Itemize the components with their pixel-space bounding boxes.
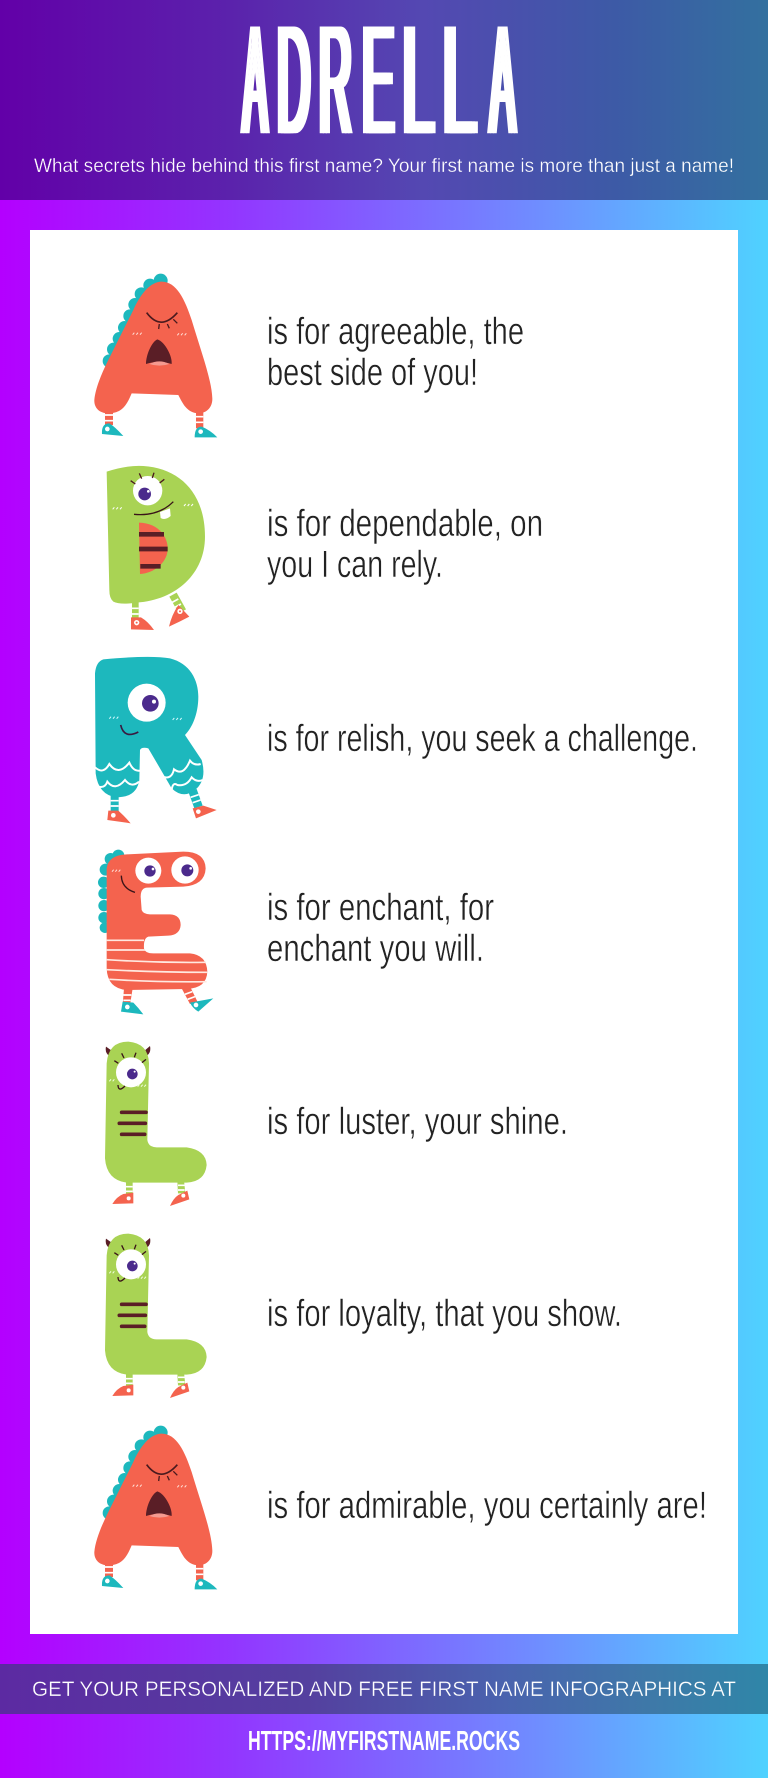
- text: L line: is for luster, your shine.: [267, 1101, 568, 1143]
- text: E line: enchant you will.: [267, 928, 484, 970]
- text: E line: [267, 887, 494, 970]
- text: A line: is for agreeable, the: [267, 311, 524, 353]
- text: D line: you I can rely.: [267, 544, 443, 586]
- footer url: HTTPS://MYFIRSTNAME.ROCKS: [248, 1726, 520, 1757]
- white content panel: [30, 230, 738, 1634]
- icon: letter E monster: [98, 850, 213, 1014]
- icon: letter D monster: [107, 466, 205, 630]
- icon: second letter A monster: [94, 1426, 217, 1589]
- text: D line: [267, 503, 543, 586]
- icon: letter L monster: [105, 1042, 207, 1206]
- text: E line: is for enchant, for: [267, 887, 494, 929]
- footer call to action: GET YOUR PERSONALIZED AND FREE FIRST NAME INFOGRAPHICS AT: [32, 1678, 736, 1701]
- text: second L line: is for loyalty, that you show.: [267, 1293, 622, 1335]
- header band: [0, 0, 768, 200]
- text: D line: is for dependable, on: [267, 503, 543, 545]
- icon: letter A monster: [94, 274, 217, 437]
- text: A line: best side of you!: [267, 352, 478, 394]
- subtitle: What secrets hide behind this first name? Your first name is more than just a name!: [34, 156, 734, 177]
- icon: letter R monster: [95, 657, 217, 823]
- text: A line: [267, 311, 524, 394]
- footer band: [0, 1664, 768, 1714]
- icon: second letter L monster: [105, 1234, 207, 1398]
- title: [240, 0, 518, 167]
